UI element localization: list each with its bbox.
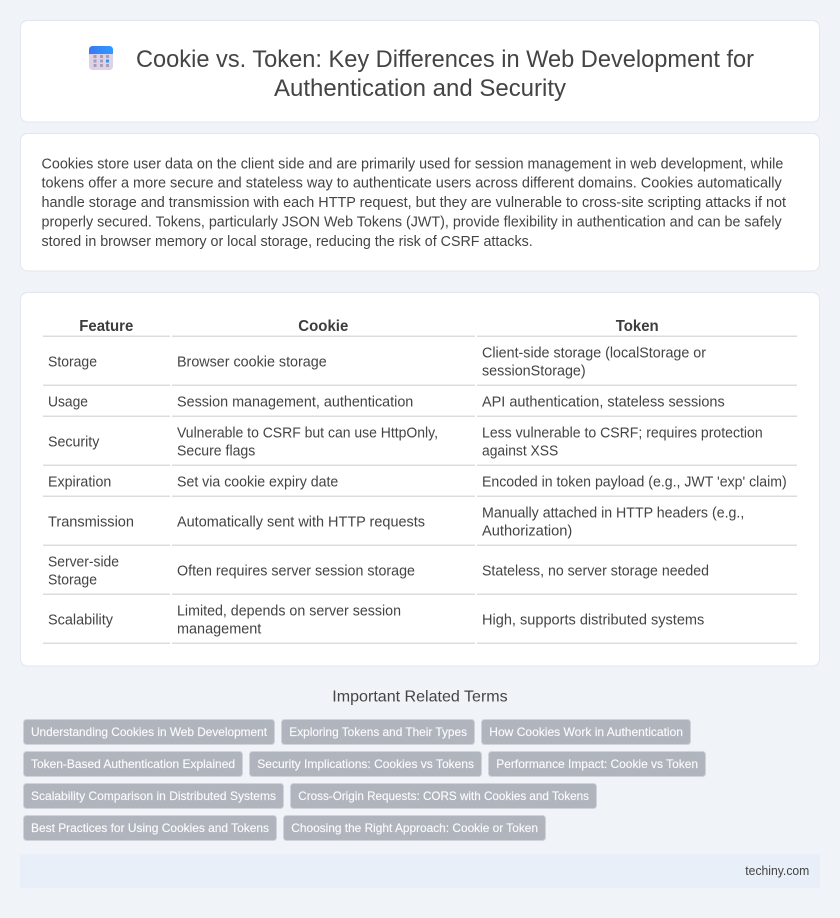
row: expiration: Expiration bbox=[48, 475, 111, 491]
intro paragraph: properly secured. Tokens, particularly JSON Web Tokens (JWT), provide flexibility in authentication and can be safely bbox=[42, 215, 782, 231]
row: transmission: Manually attached in HTTP headers (e.g., bbox=[482, 506, 744, 522]
row: security: against XSS bbox=[482, 444, 558, 460]
row: transmission bbox=[48, 506, 744, 540]
title bbox=[136, 46, 754, 102]
row: storage bbox=[48, 346, 706, 380]
row: storage: Client-side storage (localStorage or bbox=[482, 346, 706, 362]
intro paragraph: tokens offer a more secure and stateless way to authenticate users across different domains. Cookies automatically bbox=[42, 176, 783, 192]
panel: introduction bbox=[20, 134, 820, 271]
row: scalability: Scalability bbox=[48, 613, 114, 629]
footer bbox=[20, 854, 820, 888]
table header row bbox=[79, 318, 659, 335]
panel: comparison table bbox=[20, 292, 820, 666]
tag bbox=[24, 784, 284, 808]
table header row: Cookie bbox=[298, 318, 349, 335]
row: security: Vulnerable to CSRF but can use HttpOnly, bbox=[177, 426, 438, 442]
row: security: Secure flags bbox=[177, 444, 255, 460]
tag: Performance Impact: Cookie vs Token bbox=[496, 757, 698, 771]
row: server-side storage: Stateless, no server storage needed bbox=[482, 564, 709, 580]
row: usage: API authentication, stateless sessions bbox=[482, 395, 725, 411]
tag bbox=[24, 720, 274, 744]
related term tags bbox=[24, 720, 706, 840]
row: scalability: management bbox=[177, 622, 261, 638]
tag bbox=[290, 784, 596, 808]
row: storage: Browser cookie storage bbox=[177, 355, 327, 371]
row: expiration bbox=[48, 475, 787, 491]
row: expiration: Set via cookie expiry date bbox=[177, 475, 338, 491]
heading: important related terms: Important Related Terms bbox=[332, 689, 508, 706]
icon: calendar bbox=[89, 46, 113, 70]
intro paragraph bbox=[42, 156, 786, 250]
row: transmission: Authorization) bbox=[482, 524, 572, 540]
intro paragraph: handle storage and transmission with each HTTP request, but they are vulnerable to cross-site scripting attacks if not bbox=[42, 195, 786, 211]
tag: Security Implications: Cookies vs Tokens bbox=[257, 757, 474, 771]
tag bbox=[24, 816, 276, 840]
row: usage bbox=[48, 395, 725, 411]
tag: Cross-Origin Requests: CORS with Cookies and Tokens bbox=[298, 789, 589, 803]
table header row: Feature bbox=[79, 318, 134, 335]
row: security: Security bbox=[48, 435, 100, 451]
row: security bbox=[48, 426, 763, 460]
row: storage: sessionStorage) bbox=[482, 364, 586, 380]
tag bbox=[282, 720, 474, 744]
tag: Choosing the Right Approach: Cookie or Token bbox=[291, 821, 538, 835]
row: transmission: Transmission bbox=[48, 515, 134, 531]
tag: Understanding Cookies in Web Development bbox=[31, 725, 268, 739]
row: storage: Storage bbox=[48, 355, 97, 371]
tag: Token-Based Authentication Explained bbox=[31, 757, 235, 771]
row: server-side storage: Server-side bbox=[48, 555, 119, 571]
intro paragraph: stored in browser memory or local storage, reducing the risk of CSRF attacks. bbox=[42, 234, 533, 250]
row: usage: Usage bbox=[48, 395, 88, 411]
row: expiration: Encoded in token payload (e.g., JWT 'exp' claim) bbox=[482, 475, 787, 491]
table header row: Token bbox=[616, 318, 659, 335]
row: usage: Session management, authentication bbox=[177, 395, 413, 411]
panel: header bbox=[20, 20, 820, 122]
tag bbox=[250, 752, 482, 776]
tag: Scalability Comparison in Distributed Systems bbox=[31, 789, 276, 803]
tag bbox=[24, 752, 242, 776]
row: server-side storage: Often requires server session storage bbox=[177, 564, 415, 580]
footer: techiny.com bbox=[745, 864, 809, 878]
tag bbox=[482, 720, 690, 744]
row: scalability bbox=[48, 604, 704, 638]
intro paragraph: Cookies store user data on the client side and are primarily used for session management in web development, while bbox=[42, 156, 783, 172]
tag: How Cookies Work in Authentication bbox=[489, 725, 683, 739]
row: security: Less vulnerable to CSRF; requires protection bbox=[482, 426, 763, 442]
row: scalability: High, supports distributed systems bbox=[482, 613, 704, 629]
row: server-side storage: Storage bbox=[48, 573, 97, 589]
row: scalability: Limited, depends on server session bbox=[177, 604, 401, 620]
title: Authentication and Security bbox=[274, 75, 566, 102]
row: transmission: Automatically sent with HTTP requests bbox=[177, 515, 425, 531]
tag: Best Practices for Using Cookies and Tokens bbox=[31, 821, 269, 835]
tag: Exploring Tokens and Their Types bbox=[289, 725, 467, 739]
tag bbox=[488, 752, 706, 776]
title: Cookie vs. Token: Key Differences in Web Development for bbox=[136, 46, 754, 73]
row: server-side storage bbox=[48, 555, 709, 589]
tag bbox=[284, 816, 546, 840]
